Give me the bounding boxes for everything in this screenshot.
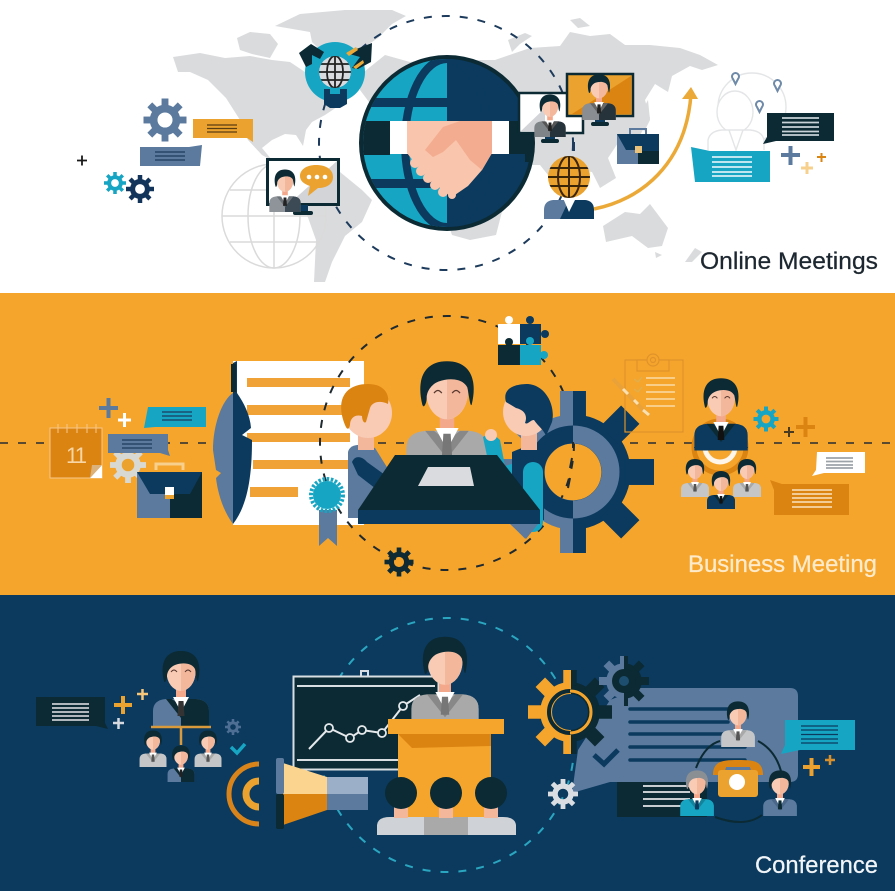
slate speech bubble bbox=[108, 434, 170, 456]
smiling eyes bbox=[434, 390, 460, 393]
calendar: 11 bbox=[66, 443, 87, 468]
plus signs bbox=[99, 398, 131, 427]
panel: conference bbox=[0, 595, 895, 891]
icon: teal globe with three hands bbox=[299, 42, 372, 108]
faint person with pins bbox=[708, 73, 786, 150]
audience bbox=[377, 777, 516, 835]
dashed orbit bbox=[319, 16, 573, 270]
teal speech bubble bbox=[781, 720, 855, 754]
leader bbox=[153, 651, 209, 727]
icon: teal gear bbox=[754, 406, 778, 432]
icon: telephone bbox=[713, 760, 763, 797]
icon: dark gear bbox=[384, 548, 414, 576]
left participant bbox=[680, 770, 714, 816]
whiteboard bbox=[294, 671, 438, 770]
plus signs bbox=[113, 689, 148, 729]
org chart connector bbox=[151, 727, 211, 745]
dark message box bbox=[617, 782, 707, 817]
slate speech bubble bbox=[140, 145, 202, 166]
heading: online meetings: Online Meetings bbox=[700, 248, 878, 275]
dashed orbit bbox=[320, 618, 574, 872]
heading: business meeting: Business Meeting bbox=[688, 551, 877, 578]
white monitor with man bbox=[519, 93, 583, 143]
icon: teal gear bbox=[104, 172, 126, 194]
icon: puzzle bbox=[498, 316, 549, 365]
team leader bbox=[694, 378, 748, 473]
teal speech bubble bbox=[691, 147, 770, 182]
clipboard outline bbox=[625, 354, 683, 432]
pen bbox=[613, 379, 647, 414]
background wire globe bbox=[222, 164, 326, 268]
podium bbox=[388, 719, 504, 820]
line chart bbox=[309, 695, 420, 749]
icon: light gear bbox=[110, 447, 146, 483]
orange speech bubble bbox=[770, 480, 849, 515]
team members bbox=[681, 459, 761, 509]
icon: briefcase bbox=[137, 464, 202, 518]
document bbox=[233, 361, 364, 525]
icon: slate gear bbox=[144, 98, 186, 142]
plus sign bbox=[77, 156, 87, 166]
sound waves bbox=[229, 764, 259, 824]
presenter bbox=[411, 637, 479, 728]
dashed horizontal line bbox=[0, 442, 895, 444]
calendar bbox=[50, 424, 102, 478]
plus signs bbox=[784, 417, 815, 437]
icon: navy gear bbox=[126, 175, 154, 203]
plus signs bbox=[803, 755, 835, 776]
handshake bbox=[390, 121, 509, 199]
white speech bubble bbox=[812, 452, 865, 476]
pen detail bbox=[623, 389, 649, 415]
center man bbox=[406, 361, 488, 472]
meeting table bbox=[358, 455, 540, 539]
video call monitor bbox=[268, 160, 338, 215]
icon: feather quill bbox=[213, 361, 252, 524]
icon: rosette badge bbox=[311, 479, 343, 546]
small slate gear bbox=[599, 656, 649, 706]
icon: big globe with handshake bbox=[359, 55, 537, 232]
amber gear bbox=[528, 670, 612, 754]
smiling eyes bbox=[171, 670, 191, 672]
globe-headed man bbox=[544, 142, 594, 219]
dark speech bubble bbox=[36, 697, 108, 729]
panel: business meeting bbox=[0, 293, 895, 595]
connecting arcs bbox=[696, 741, 781, 822]
amber speech bubble bbox=[193, 119, 256, 144]
right man bbox=[483, 384, 553, 532]
slate chat panel bbox=[572, 688, 798, 793]
icon: small slate gear bbox=[225, 719, 241, 735]
panel: online meetings bbox=[77, 10, 878, 282]
icon: briefcase bbox=[617, 129, 659, 164]
top participant bbox=[721, 701, 755, 747]
world map bbox=[173, 10, 718, 282]
check mark bbox=[231, 744, 245, 753]
teal speech bubble bbox=[144, 407, 206, 428]
left man bbox=[341, 384, 405, 518]
orange monitor with man bbox=[567, 74, 633, 126]
white gear bbox=[548, 779, 578, 809]
team members bbox=[140, 731, 221, 782]
megaphone bbox=[276, 758, 368, 829]
big gear bbox=[492, 391, 654, 553]
right participant bbox=[763, 770, 797, 816]
plus signs bbox=[781, 146, 826, 174]
dashed orbit bbox=[320, 316, 574, 570]
growth arrow bbox=[594, 87, 698, 209]
dark speech bubble bbox=[763, 113, 834, 144]
heading: conference: Conference bbox=[755, 852, 878, 879]
